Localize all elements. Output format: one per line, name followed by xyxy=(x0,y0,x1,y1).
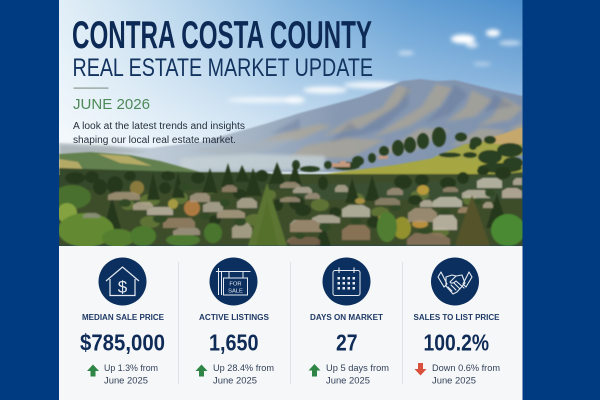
change text: June 2025 xyxy=(432,376,476,386)
hillside trees xyxy=(292,127,523,173)
label: SALES TO LIST PRICE xyxy=(414,313,500,322)
icon: for sale sign: SALE xyxy=(228,288,243,294)
change text: Up 5 days from xyxy=(326,363,389,373)
warm tree accents xyxy=(53,181,525,247)
panel: hero photo of hills and neighbourhood xyxy=(53,0,525,247)
arrow down xyxy=(414,363,426,376)
foreground conifers xyxy=(248,183,287,246)
stat: median sale price xyxy=(80,258,165,386)
arrow up xyxy=(308,364,320,376)
stat: active listings xyxy=(196,258,274,386)
label: ACTIVE LISTINGS xyxy=(199,313,269,322)
description xyxy=(73,121,245,146)
icon: for sale sign xyxy=(210,258,258,306)
arrow up xyxy=(87,364,99,376)
small trees in front of houses xyxy=(119,183,495,239)
change text: June 2025 xyxy=(213,376,257,386)
value: 100.2% xyxy=(424,330,489,356)
label: DAYS ON MARKET xyxy=(310,313,383,322)
title: CONTRA COSTA COUNTY xyxy=(72,14,372,57)
change text xyxy=(104,363,158,386)
value: 1,650 xyxy=(209,330,258,356)
change text xyxy=(213,363,274,386)
icon: house with dollar sign: $ xyxy=(118,278,128,296)
change text: June 2025 xyxy=(326,376,370,386)
stat: sales to list price xyxy=(414,258,500,386)
change text: Up 1.3% from xyxy=(104,363,158,373)
value: $785,000 xyxy=(80,330,165,356)
icon: handshake xyxy=(431,258,479,306)
change text: Up 28.4% from xyxy=(213,363,274,373)
houses xyxy=(83,178,522,245)
base of hills xyxy=(59,151,200,173)
panel: statistics xyxy=(59,246,522,400)
change text: June 2025 xyxy=(104,376,148,386)
date: JUNE 2026 xyxy=(73,96,150,113)
stat: days on market xyxy=(308,258,389,386)
value: 27 xyxy=(336,330,358,356)
change text xyxy=(326,363,389,386)
icon: for sale sign: FOR xyxy=(229,282,242,288)
arrow up xyxy=(196,364,208,376)
icon: calendar xyxy=(322,258,370,306)
midground mottled trees xyxy=(121,186,477,237)
description: A look at the latest trends and insights xyxy=(73,121,245,132)
change text xyxy=(432,363,500,386)
change text: Down 0.6% from xyxy=(432,363,500,373)
subtitle: REAL ESTATE MARKET UPDATE xyxy=(72,54,373,82)
description: shaping our local real estate market. xyxy=(73,135,236,146)
label: MEDIAN SALE PRICE xyxy=(82,313,164,322)
